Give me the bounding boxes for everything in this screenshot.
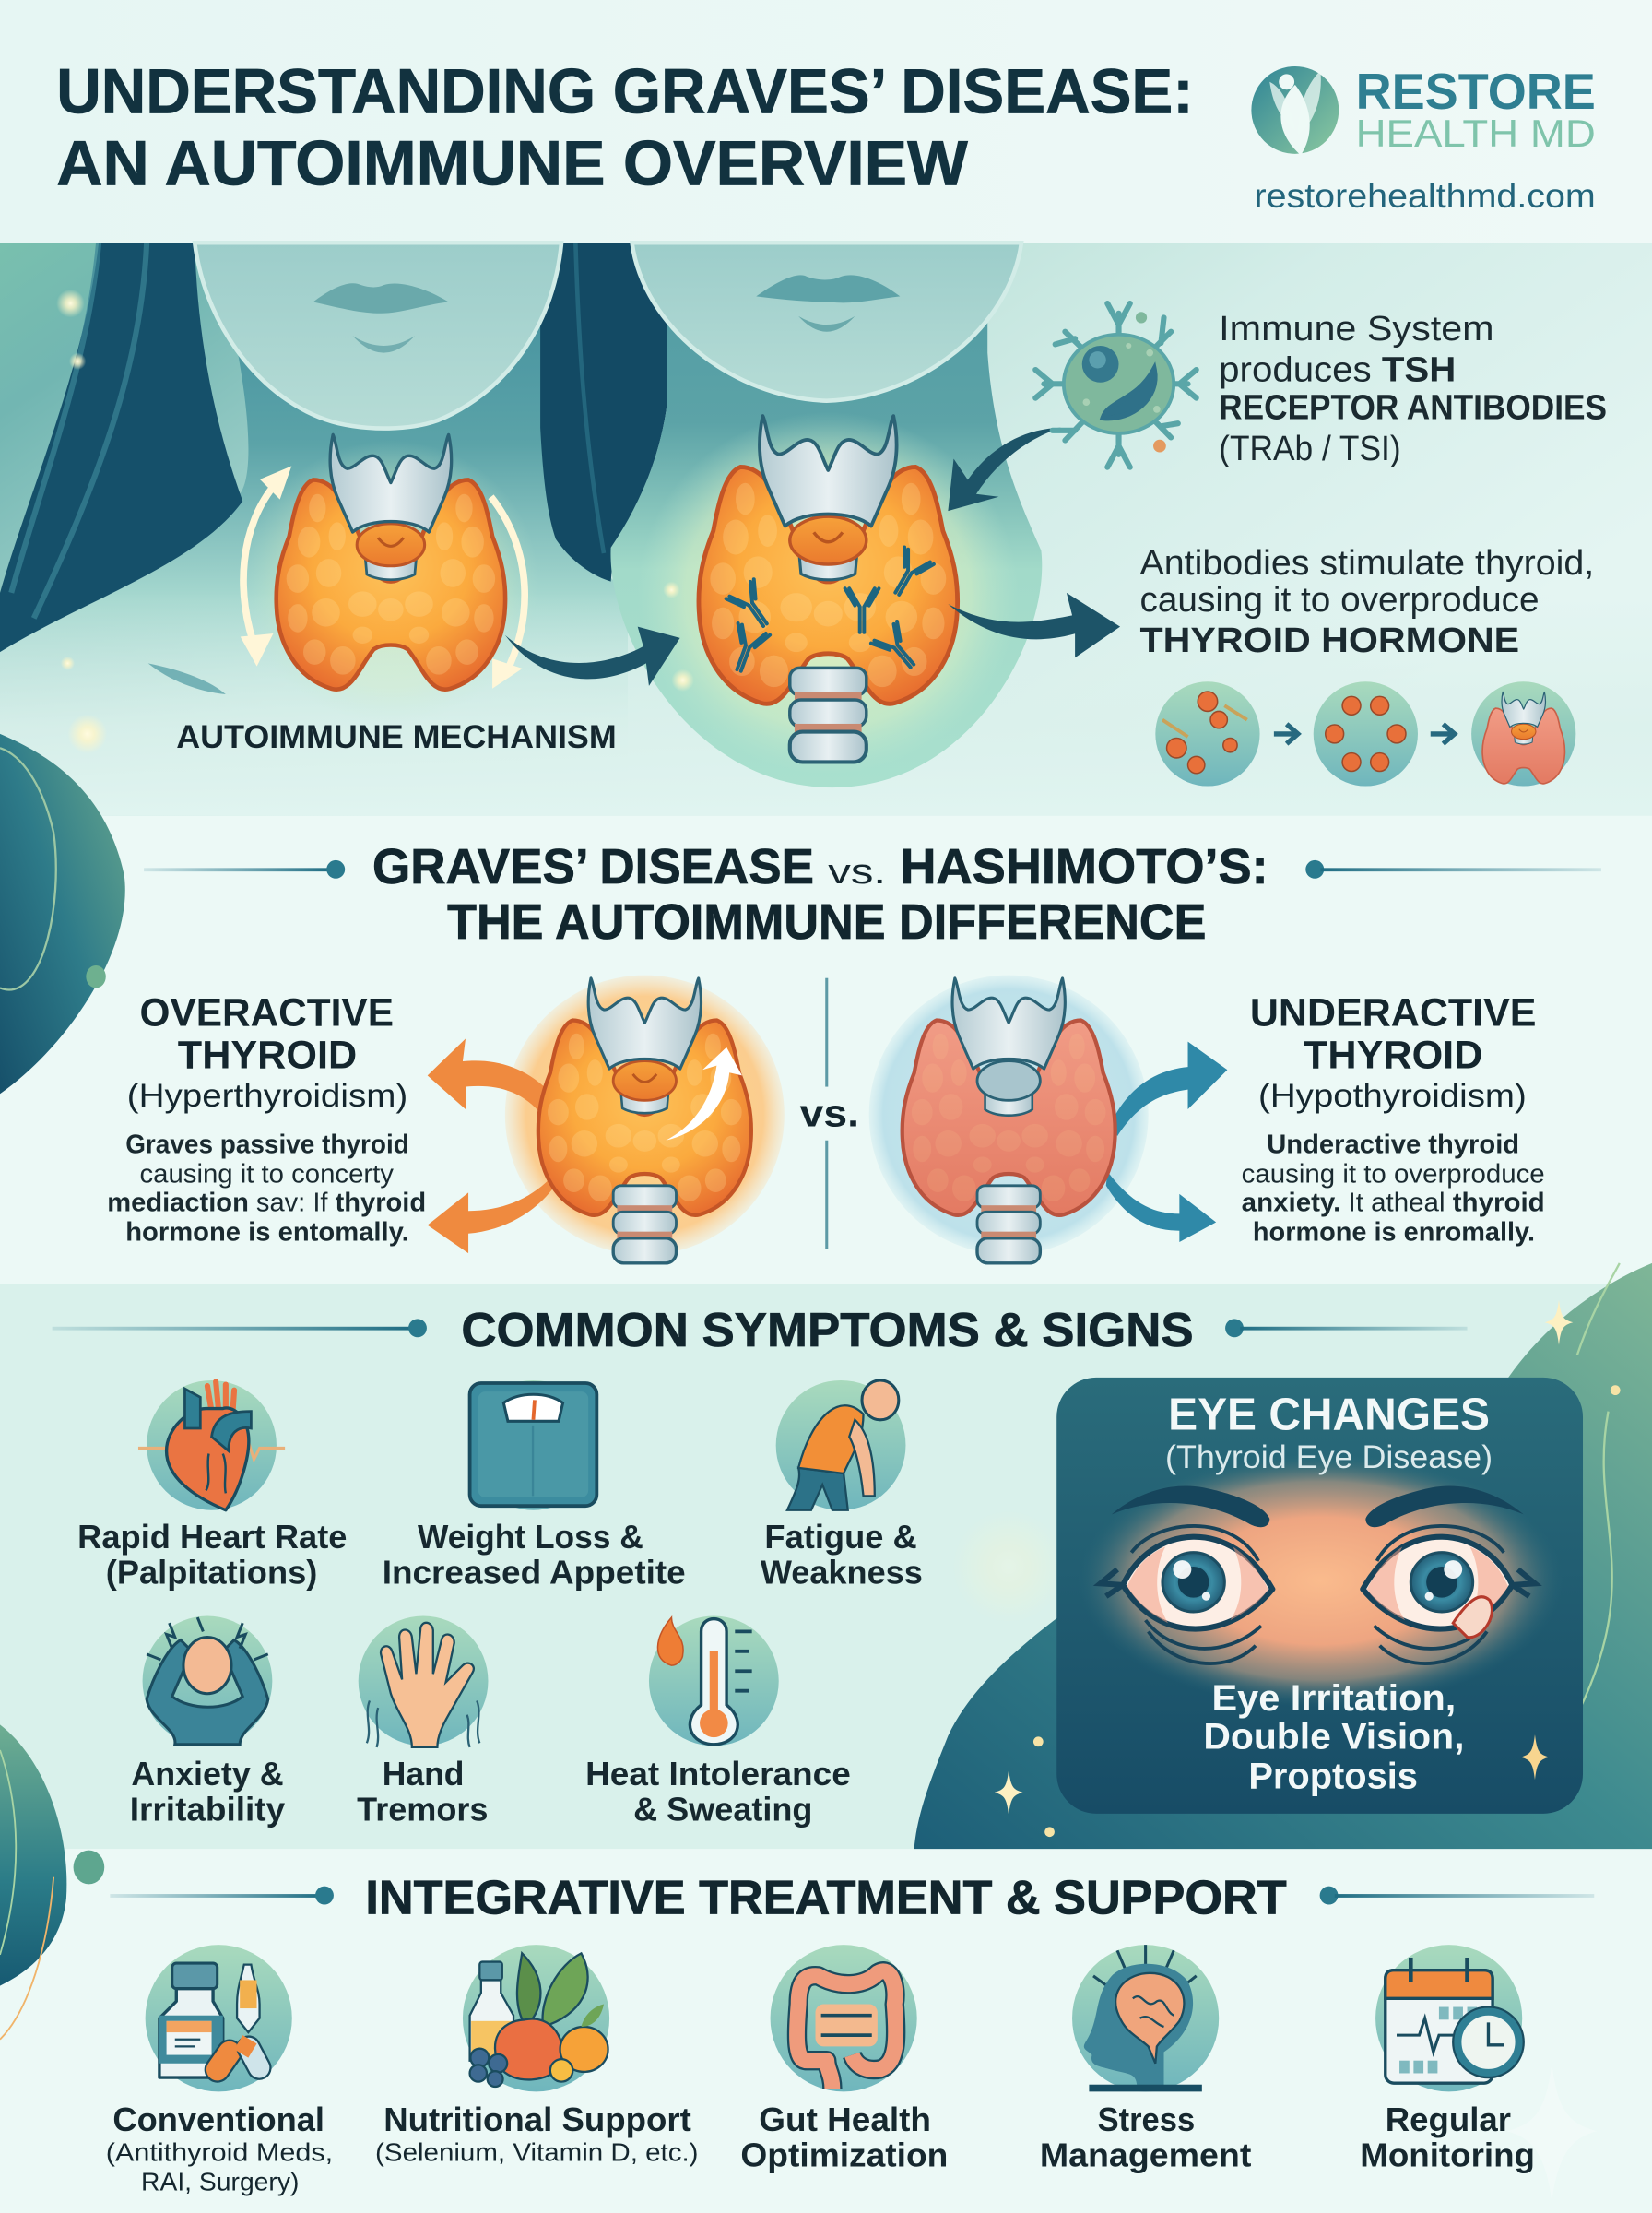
text: underactive thyroid: THYROID bbox=[1304, 1034, 1482, 1078]
treatment labels: (Antithyroid Meds, bbox=[106, 2137, 333, 2166]
title: AN AUTOIMMUNE OVERVIEW bbox=[56, 128, 968, 199]
text: overactive thyroid: hormone is entomally. bbox=[125, 1216, 409, 1246]
eye symptoms text: Proptosis bbox=[1248, 1756, 1418, 1796]
text: overactive thyroid: causing it to concerty bbox=[140, 1159, 395, 1189]
symptom: heat intolerance bbox=[649, 1616, 779, 1746]
heading: INTEGRATIVE TREATMENT & SUPPORT bbox=[365, 1872, 1287, 1925]
header panel bbox=[0, 0, 1652, 243]
treatment labels: Optimization bbox=[740, 2136, 948, 2173]
treatment labels: Gut Health bbox=[759, 2101, 931, 2138]
arrow: thyroid to hormone bbox=[948, 593, 1120, 657]
panel: autoimmune mechanism hero bbox=[0, 243, 1652, 816]
heading: HASHIMOTO’S: bbox=[900, 840, 1268, 894]
text: immune system: (TRAb / TSI) bbox=[1219, 429, 1401, 468]
treatment: stress management bbox=[1072, 1945, 1219, 2091]
icon: immune cell bbox=[1035, 303, 1197, 467]
icon: left eye bbox=[1101, 1485, 1272, 1663]
text: antibodies stimulate: Antibodies stimulate thyroid, bbox=[1139, 543, 1594, 583]
arrow: thyroid to stimulated thyroid bbox=[505, 627, 680, 686]
text: overactive thyroid bbox=[107, 991, 426, 1246]
text: underactive thyroid: Underactive thyroid bbox=[1267, 1130, 1519, 1159]
labels row two: & Sweating bbox=[633, 1790, 812, 1828]
labels row two: Heat Intolerance bbox=[585, 1755, 851, 1793]
symptom: hand tremors bbox=[359, 1616, 488, 1747]
caption: autoimmune mechanism: AUTOIMMUNE MECHANISM bbox=[176, 719, 617, 755]
decorative white sparkle bbox=[1506, 2064, 1597, 2202]
heading: vs. bbox=[828, 852, 886, 892]
heading: GRAVES’ DISEASE bbox=[372, 840, 814, 894]
text: underactive thyroid: anxiety. It atheal thyroid bbox=[1242, 1187, 1545, 1216]
central thyroid with antibodies bbox=[699, 416, 958, 762]
panel: integrative treatment and support bbox=[106, 1872, 1594, 2196]
symptom: weight loss bbox=[468, 1380, 598, 1510]
text: underactive thyroid bbox=[1242, 991, 1545, 1246]
labels row one bbox=[77, 1518, 923, 1591]
heading bbox=[110, 1872, 1594, 1925]
text: underactive thyroid: hormone is enromally. bbox=[1253, 1216, 1535, 1246]
treatment labels: Stress bbox=[1098, 2101, 1195, 2138]
treatment labels: Management bbox=[1040, 2136, 1251, 2173]
text: underactive thyroid: UNDERACTIVE bbox=[1250, 991, 1537, 1035]
text: overactive thyroid: THYROID bbox=[178, 1034, 357, 1078]
eye heading bbox=[1165, 1391, 1493, 1475]
text: underactive thyroid: causing it to overproduce bbox=[1242, 1159, 1545, 1189]
text: antibodies stimulate bbox=[1139, 543, 1594, 660]
labels row two: Hand bbox=[383, 1755, 464, 1793]
heading: COMMON SYMPTOMS & SIGNS bbox=[461, 1304, 1194, 1357]
treatment labels: (Selenium, Vitamin D, etc.) bbox=[375, 2137, 699, 2166]
icon: overactive thyroid bbox=[428, 976, 785, 1263]
treatment: conventional bbox=[146, 1945, 292, 2091]
labels row one: Weight Loss & bbox=[418, 1518, 643, 1556]
treatment labels: Monitoring bbox=[1360, 2136, 1535, 2173]
eye heading: (Thyroid Eye Disease) bbox=[1165, 1439, 1493, 1475]
panel: Graves vs Hashimoto comparison bbox=[107, 840, 1601, 1263]
treatment labels: RAI, Surgery) bbox=[141, 2168, 299, 2196]
left figure: neck and hair bbox=[0, 243, 1652, 816]
treatment labels: Regular bbox=[1386, 2101, 1511, 2138]
treatment: gut health bbox=[771, 1945, 917, 2091]
labels row one: (Palpitations) bbox=[106, 1553, 317, 1591]
labels row two: Tremors bbox=[357, 1790, 488, 1828]
text: immune system: RECEPTOR ANTIBODIES bbox=[1219, 388, 1607, 428]
title: UNDERSTANDING GRAVES’ DISEASE: bbox=[56, 55, 1194, 126]
symptom: anxiety bbox=[143, 1616, 272, 1746]
heading bbox=[53, 1304, 1468, 1357]
blob: upper left bbox=[0, 734, 125, 1094]
blob: eye panel background bbox=[914, 1263, 1652, 1849]
text: immune system bbox=[1219, 309, 1607, 468]
eye symptoms text bbox=[1203, 1678, 1464, 1796]
heading bbox=[144, 840, 1601, 950]
symptom: rapid heart rate bbox=[138, 1380, 285, 1510]
heading: THE AUTOIMMUNE DIFFERENCE bbox=[447, 895, 1206, 950]
treatment: nutritional support bbox=[463, 1945, 609, 2091]
title bbox=[56, 55, 1194, 199]
panel: eye changes bbox=[1056, 1378, 1583, 1814]
text: overactive thyroid: mediaction sav: If thyroid bbox=[107, 1187, 426, 1216]
icon chain: hormone production bbox=[1155, 681, 1575, 787]
treatment labels: Nutritional Support bbox=[384, 2101, 691, 2138]
labels row two: Irritability bbox=[130, 1790, 285, 1828]
icon: right eye bbox=[1363, 1485, 1535, 1663]
labels row one: Increased Appetite bbox=[383, 1553, 686, 1591]
text: immune system: Immune System bbox=[1219, 309, 1494, 349]
logo: Restore Health MD: restorehealthmd.com bbox=[1254, 177, 1596, 215]
treatment: regular monitoring bbox=[1375, 1945, 1524, 2091]
text: antibodies stimulate: causing it to overproduce bbox=[1139, 580, 1540, 620]
logo: Restore Health MD: RESTORE bbox=[1356, 63, 1596, 120]
eye heading: EYE CHANGES bbox=[1168, 1391, 1490, 1440]
labels row two bbox=[130, 1755, 851, 1828]
symptom: fatigue bbox=[776, 1380, 905, 1510]
text: underactive thyroid: (Hypothyroidism) bbox=[1258, 1078, 1527, 1114]
text: overactive thyroid: (Hyperthyroidism) bbox=[127, 1078, 407, 1114]
eye symptoms text: Eye Irritation, bbox=[1212, 1678, 1456, 1719]
left thyroid with arrows bbox=[242, 434, 539, 723]
treatment labels bbox=[106, 2101, 1535, 2196]
blob: lower left bbox=[0, 1724, 104, 2040]
panel: symptoms and signs bbox=[53, 1304, 1583, 1828]
text: antibodies stimulate: THYROID HORMONE bbox=[1139, 621, 1519, 660]
right figure: neck and highlighted bubble bbox=[610, 243, 1042, 787]
labels row two: Anxiety & bbox=[131, 1755, 284, 1793]
labels row one: Fatigue & bbox=[764, 1518, 917, 1556]
vs divider bbox=[800, 978, 859, 1249]
logo: Restore Health MD: HEALTH MD bbox=[1356, 112, 1596, 155]
decorative sparkles hero bbox=[56, 290, 694, 753]
icon: underactive thyroid bbox=[869, 976, 1227, 1263]
logo: Restore Health MD bbox=[1251, 63, 1596, 215]
text: overactive thyroid: OVERACTIVE bbox=[140, 991, 394, 1035]
treatment labels: Conventional bbox=[112, 2101, 324, 2138]
eye symptoms text: Double Vision, bbox=[1203, 1716, 1464, 1757]
text: immune system: produces TSH bbox=[1219, 349, 1456, 389]
arrow: immune cell to thyroid bbox=[948, 428, 1061, 511]
text: overactive thyroid: Graves passive thyroid bbox=[125, 1130, 409, 1159]
vs divider: vs. bbox=[800, 1092, 859, 1134]
labels row one: Rapid Heart Rate bbox=[77, 1518, 347, 1556]
labels row one: Weakness bbox=[761, 1553, 923, 1591]
